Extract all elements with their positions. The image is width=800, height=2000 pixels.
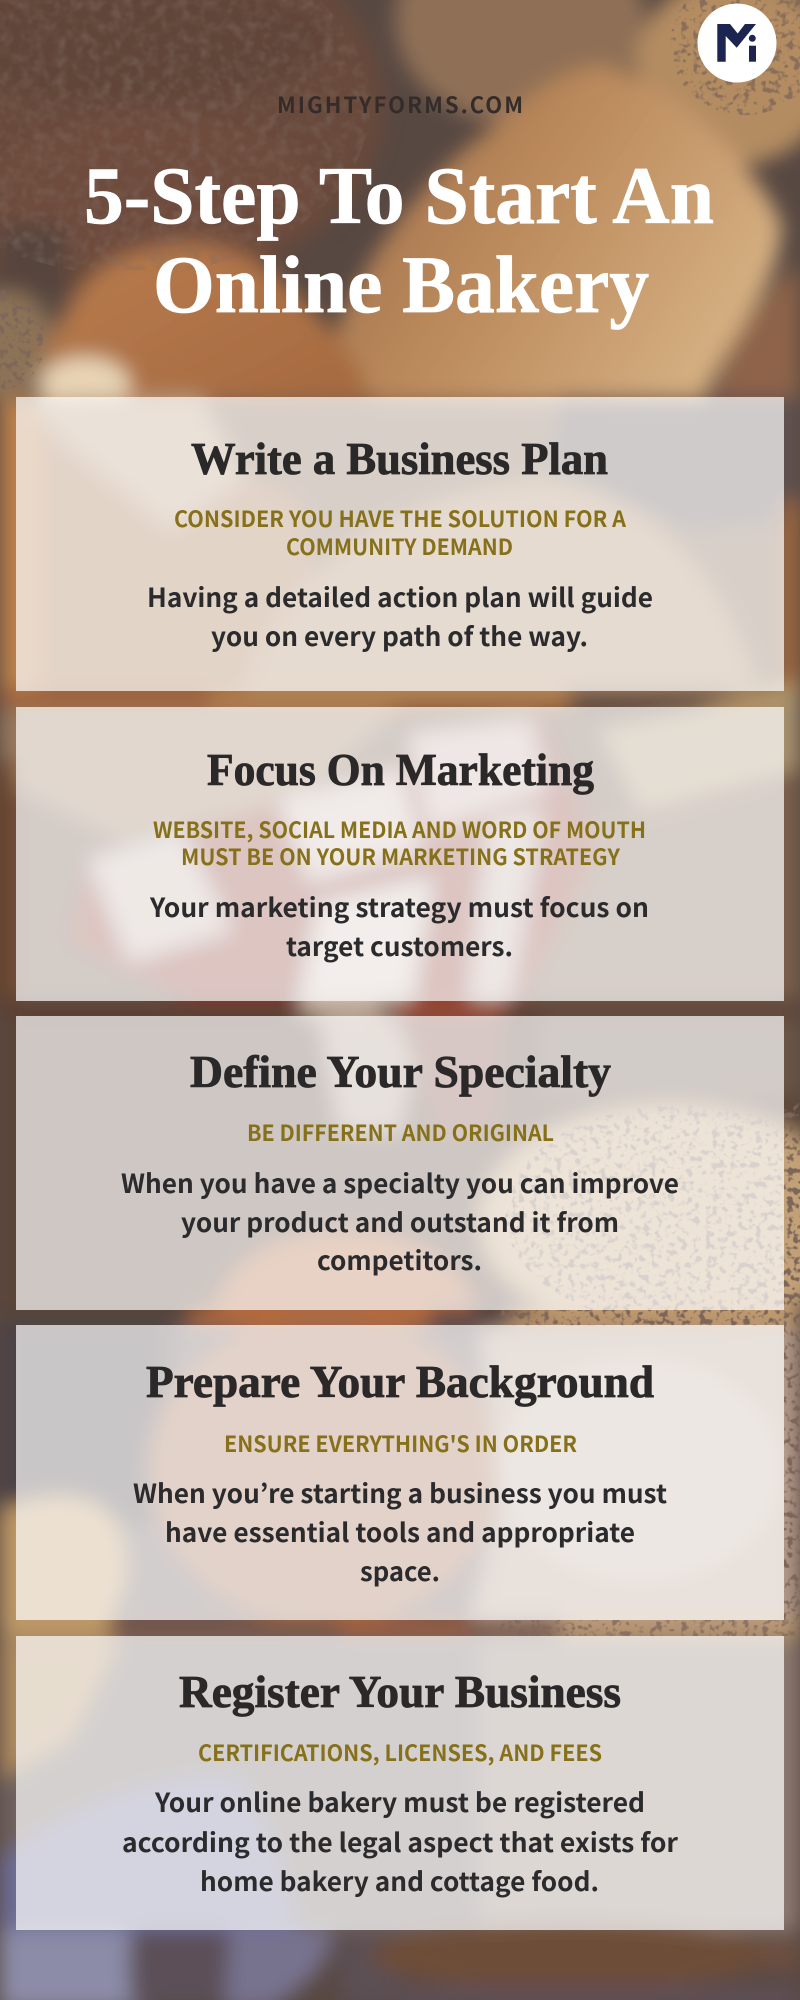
body text: your product and outstand it from	[181, 1203, 619, 1240]
subheading: CERTIFICATIONS, LICENSES, AND FEES	[198, 1736, 602, 1768]
panel: Define Your Specialty	[16, 1016, 784, 1310]
dark left gap	[0, 225, 65, 295]
heading: Write a Business Plan	[191, 434, 608, 484]
body text	[121, 1164, 679, 1278]
heading: Focus On Marketing	[207, 745, 594, 795]
crust speckle texture	[0, 0, 370, 270]
gap 2-3	[0, 1000, 800, 1017]
title: Online Bakery	[153, 239, 649, 330]
title: 5-Step To Start An	[84, 150, 714, 241]
panel: Prepare Your Background	[16, 1325, 784, 1620]
heading: Prepare Your Background	[146, 1357, 654, 1407]
body text	[149, 888, 649, 964]
panel 4 underlay	[0, 1325, 800, 1625]
panel 2 underlay	[0, 707, 800, 1001]
panel: Write a Business Plan	[16, 397, 784, 691]
subheading	[174, 502, 627, 562]
site label: MIGHTYFORMS.COM	[277, 88, 523, 120]
panel 5 underlay	[0, 1636, 800, 1932]
body text: Your online bakery must be registered	[154, 1783, 645, 1820]
icon: MightyForms logo	[698, 4, 776, 82]
subheading: CONSIDER YOU HAVE THE SOLUTION FOR A	[174, 502, 627, 534]
body text: When you’re starting a business you must	[133, 1474, 667, 1511]
heading: Define Your Specialty	[190, 1047, 611, 1097]
panel: Focus On Marketing	[16, 707, 784, 1001]
body text: Your marketing strategy must focus on	[149, 888, 649, 925]
body text: space.	[360, 1552, 440, 1589]
body text: competitors.	[317, 1241, 482, 1278]
gap 4-5	[0, 1620, 110, 1636]
subheading: ENSURE EVERYTHING'S IN ORDER	[224, 1427, 577, 1459]
top-left dark loaf	[0, 0, 385, 295]
panel 1 underlay	[0, 400, 800, 695]
subheading	[153, 813, 646, 872]
gap 1-2	[0, 690, 210, 708]
body text	[133, 1474, 667, 1589]
body text: target customers.	[286, 927, 513, 964]
subheading: WEBSITE, SOCIAL MEDIA AND WORD OF MOUTH	[153, 813, 646, 845]
body text: home bakery and cottage food.	[200, 1862, 599, 1899]
gap 3-4	[0, 1310, 190, 1326]
right lower loaf	[714, 262, 800, 410]
big centre loaf	[337, 66, 782, 410]
panel 3 underlay	[0, 1016, 800, 1310]
bottom strip	[0, 1930, 145, 2000]
title	[84, 150, 714, 330]
body text: Having a detailed action plan will guide	[147, 578, 653, 615]
body text	[122, 1783, 679, 1899]
body text: you on every path of the way.	[211, 617, 588, 654]
scarf	[70, 720, 600, 1000]
body text: according to the legal aspect that exists for	[122, 1823, 679, 1860]
panel: Register Your Business	[16, 1636, 784, 1930]
lower-left loaf	[36, 243, 372, 420]
body text	[147, 578, 653, 654]
body text: have essential tools and appropriate	[165, 1513, 635, 1550]
top right seeded loaf	[635, 0, 800, 165]
subheading: BE DIFFERENT AND ORIGINAL	[247, 1116, 554, 1148]
left seeded crust	[0, 290, 55, 400]
top centre loaf	[395, 0, 645, 125]
body text: When you have a specialty you can improve	[121, 1164, 679, 1201]
heading: Register Your Business	[179, 1667, 621, 1717]
subheading: MUST BE ON YOUR MARKETING STRATEGY	[181, 840, 620, 872]
subheading: COMMUNITY DEMAND	[286, 530, 513, 562]
